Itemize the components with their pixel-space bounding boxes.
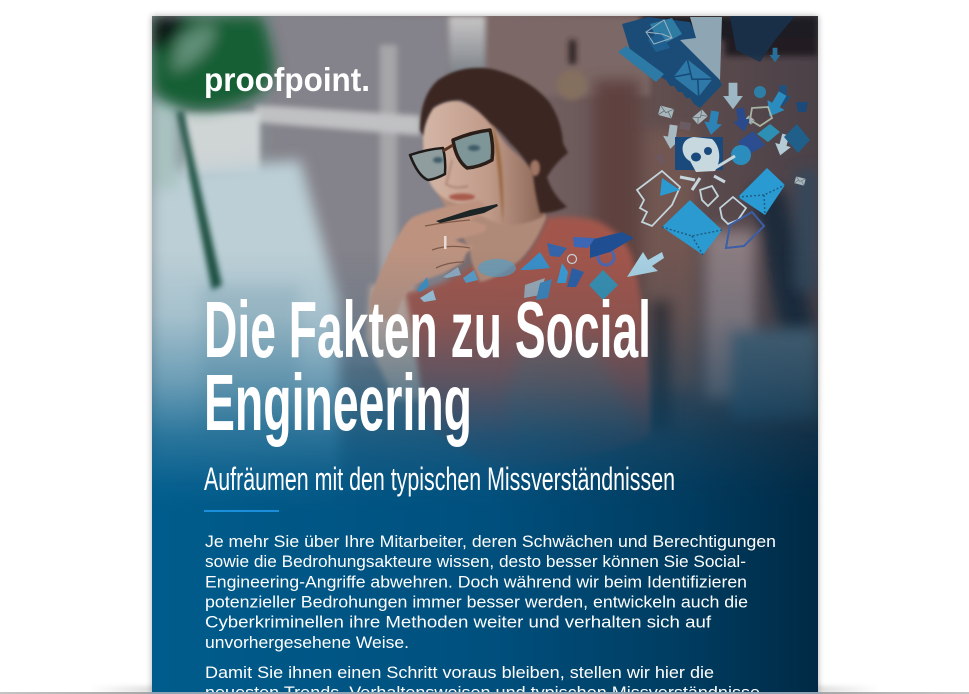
photo backdrop [152, 16, 818, 483]
intro paragraph: potenzieller Bedrohungen immer besser werden, entwickeln auch die [205, 592, 748, 612]
intro paragraph: sowie die Bedrohungsakteure wissen, desto besser können Sie Social- [205, 552, 746, 571]
intro paragraph: Je mehr Sie über Ihre Mitarbeiter, deren Schwächen und Berechtigungen [205, 532, 776, 551]
bottom edge bar [0, 692, 969, 694]
logo: proofpoint: proofpoint. [204, 61, 370, 98]
big cursor arrow at top [680, 17, 722, 80]
pointer triangle inside hand [660, 178, 680, 196]
eyes [433, 145, 480, 163]
title: Die Fakten zu Social [204, 285, 651, 374]
page shadow [152, 16, 818, 694]
nose shadow [446, 160, 468, 188]
arrow icons [661, 48, 794, 158]
plant stem [177, 112, 222, 290]
forearm under the title [366, 285, 428, 400]
ring [444, 236, 446, 249]
finger creases [425, 220, 470, 268]
glasses [410, 130, 493, 180]
document and small blue icons [731, 86, 810, 165]
lower arrow cursor [627, 252, 664, 277]
title: Engineering [204, 358, 472, 447]
intro paragraph [205, 532, 776, 652]
intro paragraph: unvorhergesehene Weise. [205, 633, 409, 652]
sleeve and fold over the chest [512, 342, 616, 412]
woman's neck and chest [437, 192, 547, 283]
green plant [150, 16, 274, 110]
dark pixel cluster at top [618, 16, 795, 108]
pixel hand cursors [637, 107, 772, 226]
ear [530, 160, 540, 176]
bottom soft glow [90, 686, 880, 694]
small envelope icons [654, 105, 806, 186]
large envelope left [662, 200, 722, 255]
woman's hair [420, 68, 568, 213]
icon swarm: malware symbols dispersing [417, 16, 810, 302]
scattered icons over shirt [417, 232, 634, 302]
second paragraph: Damit Sie ihnen einen Schritt voraus bleiben, stellen wir hier die [205, 663, 714, 682]
intro paragraph: Cyberkriminellen ihre Methoden weiter und verhalten sich auf [205, 612, 711, 632]
pen [436, 204, 498, 223]
accent rule [204, 510, 279, 512]
woman's face [423, 101, 544, 225]
blurred curtains on the right [594, 80, 818, 430]
large envelope right [738, 168, 785, 215]
envelope on dark diamond [673, 59, 713, 97]
envelope outline near the top [646, 20, 672, 44]
intro paragraph: Engineering-Angriffe abwehren. Doch während wir beim Identifizieren [205, 572, 747, 592]
subtitle: Aufräumen mit den typischen Missverständnissen [204, 461, 675, 497]
skull and crossbones on envelope [675, 137, 735, 190]
blurred room and window [182, 16, 818, 328]
title [204, 285, 651, 447]
hand and wrist [370, 200, 487, 320]
woman's shirt [405, 217, 650, 470]
hanging lamp [562, 36, 585, 100]
blurred monitor [152, 100, 340, 500]
second paragraph [205, 663, 760, 694]
strand of hair [492, 124, 503, 225]
outlined blue hand [726, 212, 764, 248]
blue gradient overlay [152, 250, 818, 694]
photo: woman at a desk [152, 16, 818, 483]
lips [449, 194, 475, 200]
